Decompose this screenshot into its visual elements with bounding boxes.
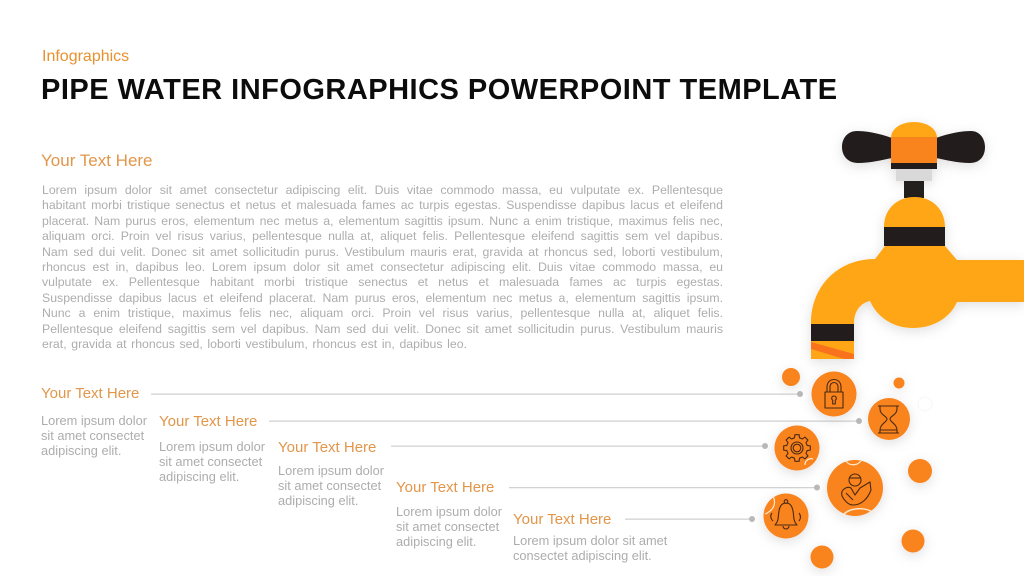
small drops bbox=[782, 368, 932, 568]
item 3 text: adipiscing elit. bbox=[278, 493, 358, 508]
item 1 text bbox=[41, 385, 147, 458]
item 3 text bbox=[278, 439, 384, 508]
main heading: Your Text Here bbox=[41, 151, 153, 170]
item 5 text: consectet adipiscing elit. bbox=[513, 548, 652, 562]
item 2 text bbox=[159, 413, 265, 484]
item 1 text: Your Text Here bbox=[41, 385, 139, 402]
main body text: Pellentesque eleifend sagittis sem vel dapibus. Nam sed dui velit. Donec sit amet sollicitudin purus. Vestibulum mauris bbox=[42, 322, 723, 336]
icon: person with check bbox=[827, 460, 883, 516]
item 4 text bbox=[396, 479, 502, 549]
main body text: aliquam orci. Proin vel risus varius, pellentesque nulla at, aliquet felis. Pellentesque eleifend sagittis sem vel dapibus. bbox=[42, 229, 723, 243]
item 3 text: Your Text Here bbox=[278, 439, 376, 456]
main body text: Suspendisse dapibus lacus et eleifend placerat. Nam purus eros, elementum nec metus a, elementum sagittis ipsum. bbox=[42, 291, 723, 305]
item 5 text bbox=[513, 511, 668, 562]
main body text: Nam sed dui velit. Donec sit amet sollicitudin purus. Vestibulum mauris erat, gravida at rhoncus sed, loborti vestibulum, bbox=[42, 245, 723, 259]
faucet handle bbox=[842, 122, 985, 181]
item 1 text: adipiscing elit. bbox=[41, 443, 121, 458]
icon: gear bbox=[774, 426, 820, 470]
icon: hourglass bbox=[868, 398, 910, 440]
item 5 text: Your Text Here bbox=[513, 511, 611, 528]
item 4 text: adipiscing elit. bbox=[396, 534, 476, 549]
item 3 text: Lorem ipsum dolor bbox=[278, 463, 384, 478]
main body text bbox=[42, 183, 723, 351]
item 4 text: Lorem ipsum dolor bbox=[396, 504, 502, 519]
title: PIPE WATER INFOGRAPHICS POWERPOINT TEMPLATE bbox=[41, 74, 838, 106]
item 2 text: Your Text Here bbox=[159, 413, 257, 430]
main body text: Nunc a enim tristique, maximus felis nec, aliquam orci. Proin vel risus varius, pellentesque nulla at, aliquet felis. bbox=[42, 306, 723, 320]
main body text: vulputate ex. Pellentesque habitant morbi tristique senectus et netus et malesuada fames ac turpis egestas. bbox=[42, 275, 723, 289]
main body text: Lorem ipsum dolor sit amet consectetur adipiscing elit. Duis vitae commodo massa, eu vulputate ex. Pellentesque bbox=[42, 183, 723, 197]
item 3 text: sit amet consectet bbox=[278, 478, 381, 493]
faucet bbox=[811, 122, 1024, 359]
item 4 text: sit amet consectet bbox=[396, 519, 499, 534]
item 2 text: adipiscing elit. bbox=[159, 469, 239, 484]
item 1 text: sit amet consectet bbox=[41, 428, 144, 443]
item 4 text: Your Text Here bbox=[396, 479, 494, 496]
item 5 text: Lorem ipsum dolor sit amet bbox=[513, 533, 667, 548]
faucet stem bbox=[904, 181, 924, 198]
main body text: placerat. Nam purus eros, elementum nec metus a, elementum sagittis ipsum. Nunc a enim tristique, maximus felis nec, bbox=[42, 214, 723, 228]
icon: lock bbox=[812, 372, 856, 416]
item 2 text: sit amet consectet bbox=[159, 454, 262, 469]
main body text: habitant morbi tristique senectus et netus et malesuada fames ac turpis egestas. Suspendisse dapibus lacus et eleifend bbox=[42, 198, 723, 212]
faucet body bbox=[811, 197, 1024, 359]
main body text: erat, gravida at rhoncus sed, loborti vestibulum, rhoncus est in, dapibus leo. bbox=[42, 337, 467, 351]
item 2 text: Lorem ipsum dolor bbox=[159, 439, 265, 454]
connector lines bbox=[151, 391, 862, 522]
icon: bell bbox=[764, 494, 808, 538]
main body text: rhoncus est in, dapibus leo. Lorem ipsum dolor sit amet consectetur adipiscing elit. Duis vitae commodo massa, eu bbox=[42, 260, 723, 274]
item 1 text: Lorem ipsum dolor bbox=[41, 413, 147, 428]
kicker: Infographics bbox=[42, 48, 129, 65]
faint bubble bbox=[918, 397, 932, 411]
